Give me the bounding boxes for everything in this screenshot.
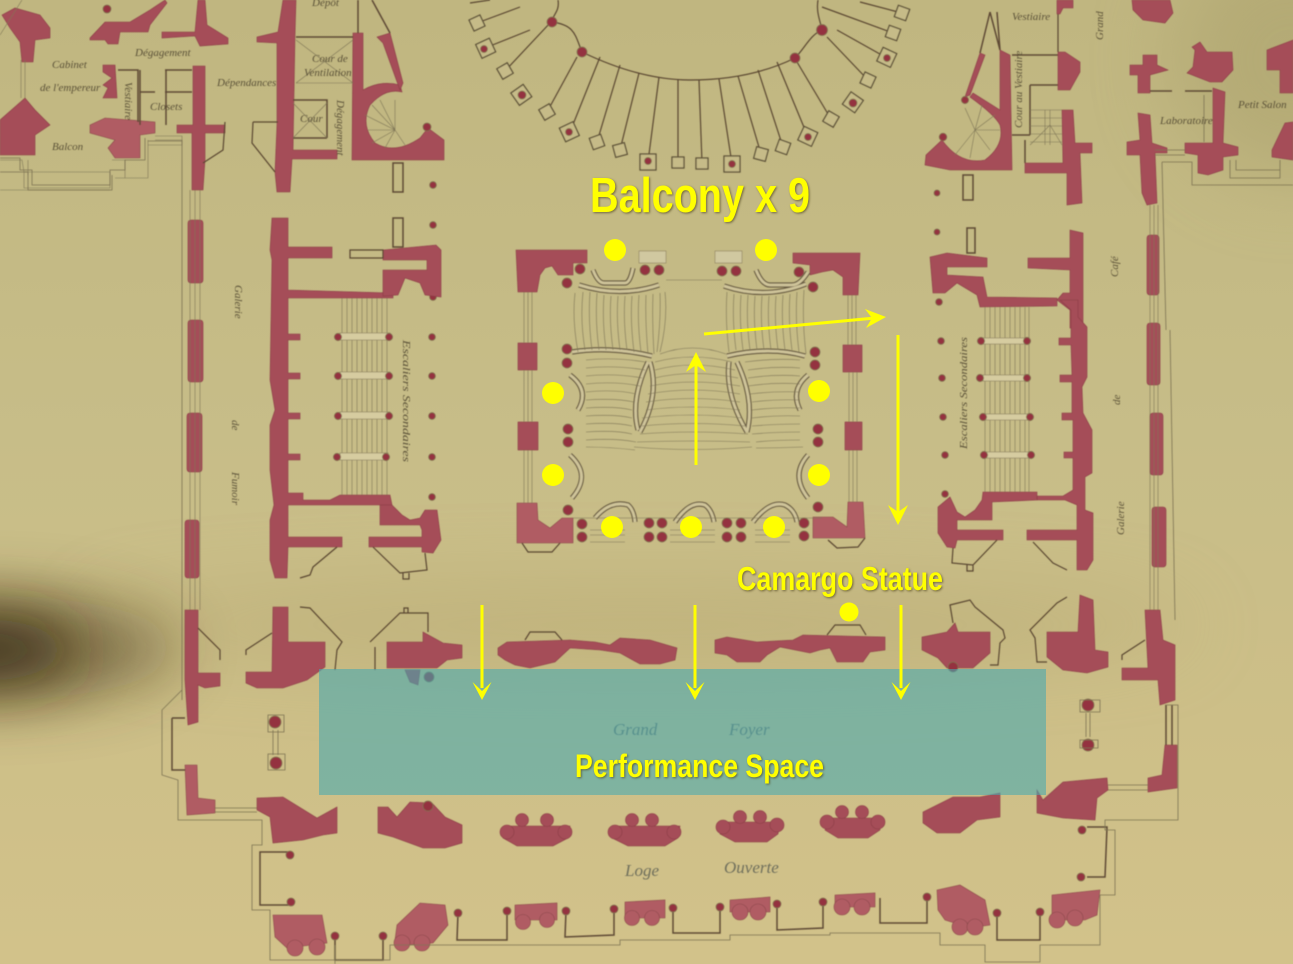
arrow: toward the right gallery [704, 309, 886, 334]
seating rows [574, 292, 666, 354]
handwritten room labels: Dégagement [134, 47, 192, 59]
handwritten room labels: Dépendances [216, 77, 276, 89]
handwritten room labels: Cour au Vestiaire [1013, 51, 1025, 128]
handwritten room labels: Loge [624, 861, 659, 880]
plan: central auditorium stair hall [516, 250, 865, 552]
handwritten room labels: Grand [1094, 11, 1106, 40]
heading: Balcony x 9: Balcony x 9 [590, 169, 810, 223]
handwritten room labels: Foyer [728, 720, 770, 739]
balcony curves [570, 268, 808, 522]
handwritten room labels: Dégagement [334, 99, 346, 157]
handwritten room labels: Laboratoire [1159, 115, 1213, 127]
plan: left secondary staircase [270, 218, 441, 579]
plan: right secondary staircase and spiral stair [925, 0, 1093, 571]
plan: upper-left imperial rooms [0, 0, 228, 190]
label: Camargo Statue: Camargo Statue [737, 560, 943, 597]
handwritten room labels: Galerie [232, 285, 244, 319]
arrow: rising through centre stair [686, 352, 706, 465]
handwritten room labels: Escaliers Secondaires [958, 337, 970, 450]
plan: long gallery side walls [148, 140, 1175, 700]
plan: upper-left service rooms and spiral stair [252, 0, 444, 500]
arrow: left entrance to the foyer [472, 605, 492, 700]
balcony markers [542, 239, 830, 538]
handwritten room labels: de [229, 420, 241, 430]
handwritten room labels: Vestiaire [1012, 11, 1050, 23]
handwritten room labels: Café [1109, 255, 1121, 277]
handwritten room labels: Balcon [52, 141, 84, 153]
arrow: centre entrance to the foyer [686, 605, 704, 700]
handwritten room labels: Cabinet [52, 59, 88, 71]
plan: loggia pier row [257, 778, 1108, 848]
handwritten room labels: Cour de [312, 53, 348, 65]
handwritten room labels: Cour [300, 113, 323, 125]
plan: upper-right laboratory rooms [1127, 0, 1293, 330]
handwritten room labels: Closets [150, 101, 182, 113]
handwritten room labels: Ouverte [724, 858, 779, 877]
arrow: right entrance to the foyer [892, 605, 910, 700]
columns [575, 264, 585, 274]
plan: facade pier row [162, 690, 1178, 964]
handwritten room labels: Grand [613, 720, 658, 739]
handwritten room labels: de l'empereur [40, 82, 101, 94]
plan: rotunda with radial seating ribs [469, 0, 910, 172]
handwritten room labels: Vestiaire [122, 82, 134, 120]
plan: foyer end walls [172, 705, 1177, 815]
handwritten room labels: Petit Salon [1237, 99, 1287, 111]
panel: performance space overlay [319, 669, 1046, 795]
handwritten room labels: Ventilation [304, 67, 352, 79]
handwritten room labels: de [1111, 394, 1123, 405]
handwritten room labels: Galerie [1115, 501, 1127, 535]
plan: grand foyer inner pier row [185, 595, 1175, 725]
arrow: down the right corridor [888, 335, 908, 525]
statue marker [840, 602, 858, 622]
plan: stair posts beside the foyer [268, 699, 1100, 770]
label: Performance Space: Performance Space [575, 748, 824, 784]
handwritten room labels: Fumoir [229, 471, 241, 506]
handwritten room labels: Escaliers Secondaires [400, 339, 412, 462]
